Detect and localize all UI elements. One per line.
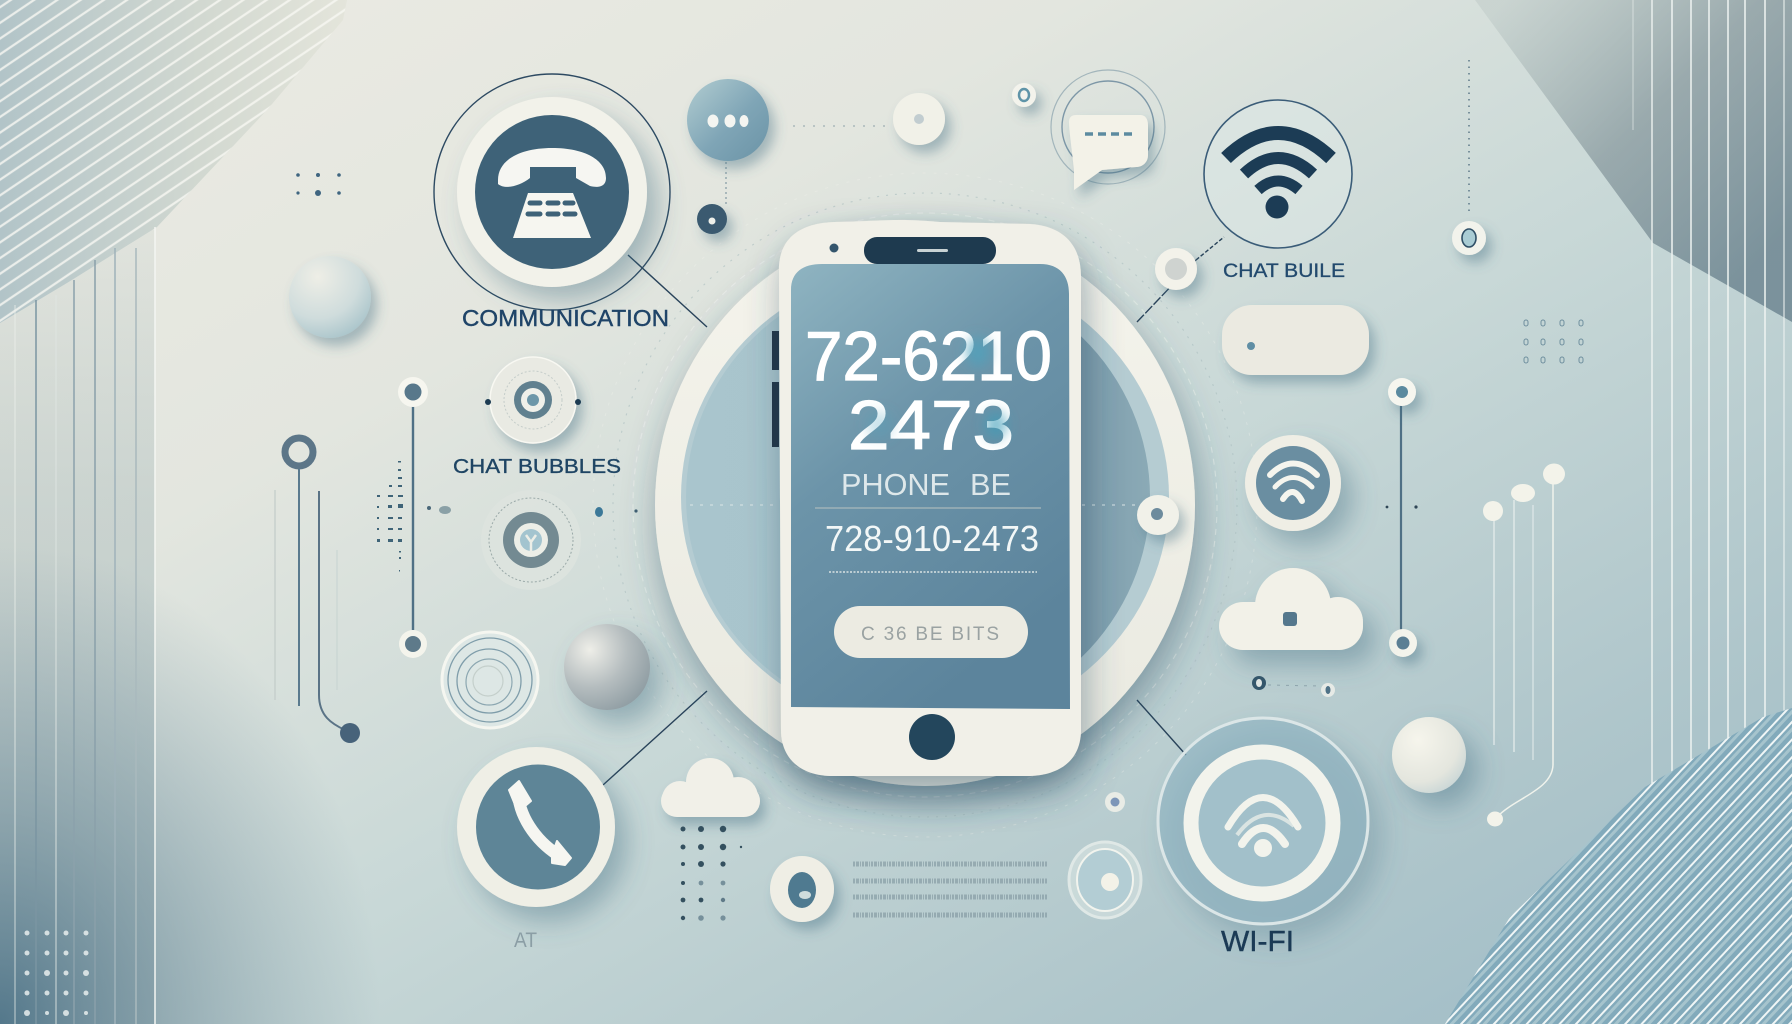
dots: top left small group — [296, 173, 341, 196]
phone label: BE — [970, 467, 1011, 502]
icon: connector node — [1155, 248, 1197, 290]
icon: top small node — [793, 93, 945, 145]
text block: fine print lines — [853, 864, 1047, 915]
phone number large: 72-6210 — [805, 317, 1052, 395]
dotted line — [829, 571, 1037, 573]
dotted orbit arcs — [593, 173, 1257, 837]
icon: target dial — [485, 357, 581, 443]
label: wi-fi: WI-FI — [1221, 926, 1294, 958]
top-left hatched corner — [0, 0, 350, 325]
phone notch — [830, 237, 996, 264]
base — [513, 193, 591, 238]
icon: small blue ring — [1012, 83, 1036, 107]
left connector with ring node — [275, 438, 360, 743]
right vertical lines — [1633, 0, 1784, 800]
icon: spiral circle — [442, 632, 538, 728]
phone number second line: 2473 — [848, 386, 1014, 464]
icon: telephone badge — [434, 74, 670, 310]
sphere: metallic — [564, 624, 650, 710]
phone screen — [791, 264, 1070, 709]
left node connector — [398, 377, 428, 658]
phone — [779, 220, 1081, 776]
icon: wi-fi top right — [1204, 100, 1352, 248]
icon: small cloud with rain dots — [661, 758, 760, 921]
left vertical lines — [15, 227, 155, 1024]
phone label: PHONE — [841, 467, 950, 502]
connector lines — [603, 237, 1224, 785]
panel: large ring behind phone — [655, 224, 1195, 786]
phone label — [841, 467, 1011, 502]
phone number small: 728-910-2473 — [825, 518, 1039, 559]
label: chat bubbles: CHAT BUBBLES — [453, 455, 621, 478]
icon: small dark dot — [697, 204, 727, 234]
dots: right grid — [1524, 320, 1583, 363]
label: at: AT — [514, 929, 537, 952]
sphere: top left — [289, 256, 371, 338]
divider — [815, 507, 1041, 509]
glare on digits — [866, 337, 1007, 439]
icon: ring node right — [1137, 495, 1179, 535]
icon: handset badge — [457, 747, 615, 907]
icon: small eye node — [770, 856, 834, 922]
icon: ring with white dot — [1069, 842, 1141, 918]
right connector with nodes — [1386, 378, 1418, 657]
pill button — [834, 606, 1028, 658]
icon: tiny ring — [1105, 792, 1125, 812]
sphere: egg bottom right — [1392, 717, 1466, 793]
lollipop lines — [1483, 464, 1565, 826]
icon: chat bubble — [1051, 70, 1165, 190]
icon: paired tiny nodes — [1252, 676, 1335, 697]
phone body — [779, 220, 1081, 776]
label: communication: COMMUNICATION — [462, 305, 669, 331]
handset — [498, 148, 606, 187]
bottom-right hatched corner — [1440, 700, 1792, 1024]
icon: large cloud — [1219, 568, 1363, 650]
label: chat bule: CHAT BUILE — [1223, 261, 1345, 282]
home button — [909, 714, 955, 760]
pill button: C 36 BE BITS — [861, 624, 999, 645]
icon: small dots row — [427, 506, 638, 517]
icon: right top node with dotted line — [1452, 60, 1486, 255]
icon: loading dial — [481, 490, 581, 590]
pill card — [1222, 305, 1369, 375]
phone side buttons — [772, 331, 779, 447]
icon: small wi-fi badge — [1245, 435, 1341, 531]
icon: typing dots bubble — [687, 79, 769, 205]
dot matrix beside left connector — [377, 461, 403, 572]
keys — [528, 203, 575, 214]
icon: large wi-fi badge — [1158, 718, 1368, 924]
dots: bottom left grid — [24, 930, 89, 1016]
